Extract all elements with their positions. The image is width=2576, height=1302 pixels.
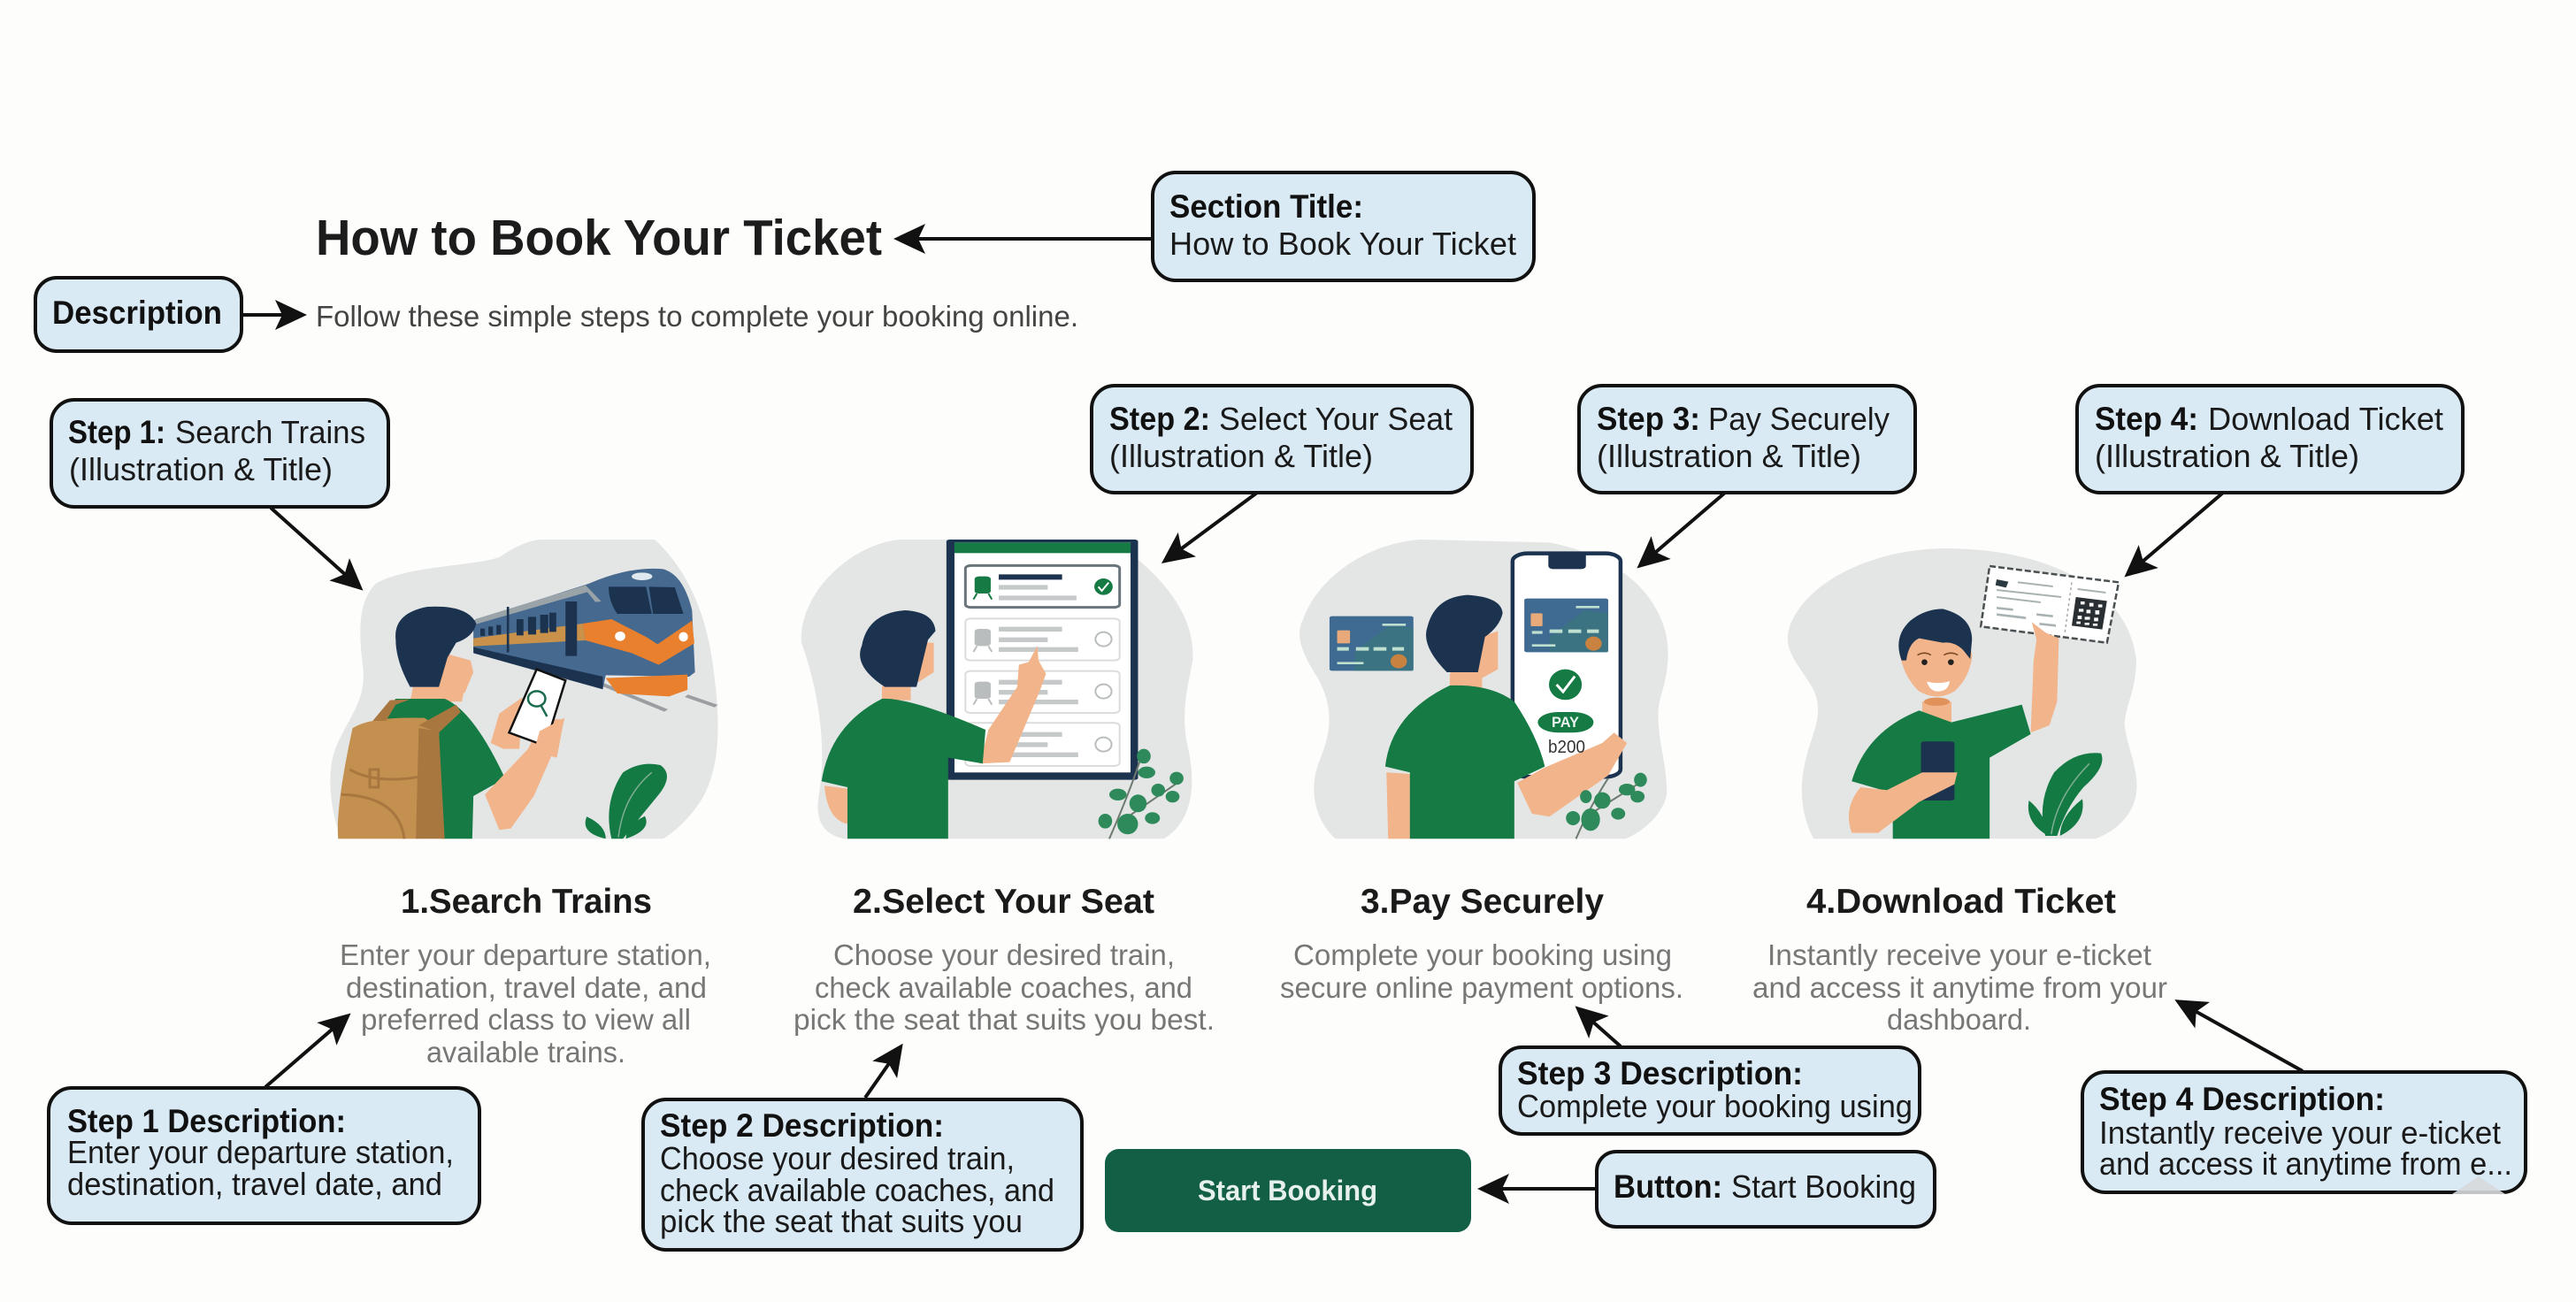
- step 1 description: available trains.: [426, 1036, 625, 1068]
- callout: step 3: Step 3:: [1597, 401, 1700, 437]
- callout: step 2 description: pick the seat that suits you: [660, 1203, 1023, 1239]
- callout: section title: [1153, 172, 1534, 280]
- step 4 description: Instantly receive your e-ticket: [1767, 938, 2151, 971]
- arrow: description: [242, 313, 298, 317]
- callout: step 4: [2077, 386, 2463, 493]
- callout: button: [1597, 1152, 1935, 1227]
- callout: section title: How to Book Your Ticket: [1169, 226, 1516, 262]
- callout: step 2: (Illustration & Title): [1109, 438, 1373, 474]
- callout: step 4 description: Step 4 Description:: [2099, 1081, 2385, 1117]
- illustration: pay securely: [1300, 540, 1668, 839]
- callout: button: Start Booking: [1731, 1168, 1916, 1205]
- callout: step 4 description: Instantly receive your e-ticket: [2099, 1114, 2501, 1151]
- callout: step 4 description: [2082, 1072, 2526, 1194]
- callout: step 1 description: Step 1 Description:: [67, 1103, 346, 1139]
- step 1 description: preferred class to view all: [361, 1003, 691, 1036]
- step 3 description: [1280, 938, 1683, 1004]
- callout: step 2 description: Choose your desired train,: [660, 1140, 1015, 1176]
- step 4 description: dashboard.: [1887, 1003, 2031, 1036]
- amount label: b200: [1548, 738, 1585, 757]
- callout: description: [35, 278, 242, 351]
- arrow: button: [1486, 1187, 1597, 1191]
- callout: step 4: (Illustration & Title): [2095, 438, 2359, 474]
- callout: description: Description: [52, 295, 222, 331]
- arrow: step 3: [1644, 493, 1725, 563]
- callout: step 3 description: Step 3 Description:: [1517, 1055, 1803, 1091]
- step 4 heading: 4.Download Ticket: [1806, 883, 2116, 921]
- step 3 heading: 3.Pay Securely: [1361, 883, 1604, 921]
- callout: step 1 description: Enter your departure station,: [67, 1134, 454, 1170]
- callout: button: Button:: [1614, 1168, 1722, 1205]
- arrow: step 2: [1169, 493, 1257, 558]
- callout: step 1: [51, 400, 388, 507]
- callout: step 2: [1092, 386, 1472, 493]
- arrow: step 4: [2131, 493, 2223, 571]
- callout: step 3 description: Complete your booking using: [1517, 1088, 1913, 1124]
- callout: step 1 description: destination, travel date, and: [67, 1166, 442, 1202]
- callout: step 1: Search Trains: [175, 414, 365, 450]
- illustration: search trains: [330, 540, 718, 839]
- step 1 heading: 1.Search Trains: [401, 883, 652, 921]
- step 1 description: destination, travel date, and: [346, 971, 707, 1004]
- arrow: step 1: [271, 508, 356, 585]
- arrow: section title to title: [902, 237, 1153, 241]
- arrow: step 3 description: [1582, 1012, 1621, 1046]
- callout: section title: Section Title:: [1169, 188, 1363, 225]
- callout: step 3 description: [1500, 1047, 1920, 1134]
- step 2 description: check available coaches, and: [815, 971, 1192, 1004]
- step 2 description: [794, 938, 1215, 1036]
- step 3 description: Complete your booking using: [1293, 938, 1672, 971]
- callout: step 2: Select Your Seat: [1219, 401, 1453, 437]
- callout: step 2 description: [643, 1099, 1082, 1250]
- callout: step 2: Step 2:: [1109, 401, 1210, 437]
- step 2 heading: 2.Select Your Seat: [853, 883, 1154, 921]
- callout: step 3: [1579, 386, 1915, 493]
- callout: step 1: Step 1:: [68, 414, 165, 450]
- callout: step 2 description: check available coaches, and: [660, 1172, 1054, 1208]
- step 3 description: secure online payment options.: [1280, 971, 1683, 1004]
- title: How to Book Your Ticket: [316, 210, 882, 266]
- step 4 description: and access it anytime from your: [1752, 971, 2167, 1004]
- arrow: step 1 description: [265, 1019, 344, 1087]
- callout: step 3: (Illustration & Title): [1597, 438, 1861, 474]
- illustration: download ticket: [1788, 548, 2136, 839]
- pay label: PAY: [1552, 714, 1580, 731]
- callout: step 4: Download Ticket: [2208, 401, 2443, 437]
- callout: step 4: Step 4:: [2095, 401, 2198, 437]
- step 2 description: pick the seat that suits you best.: [794, 1003, 1215, 1036]
- callout: step 1: (Illustration & Title): [69, 451, 333, 487]
- step 4 description: [1752, 938, 2167, 1036]
- button: start booking: [1105, 1149, 1471, 1232]
- step 1 description: [340, 938, 711, 1068]
- arrow: step 4 description: [2182, 1004, 2303, 1071]
- callout: step 4 description: and access it anytime from e...: [2099, 1145, 2512, 1182]
- illustration: select your seat: [801, 540, 1192, 839]
- callout: step 2 description: Step 2 Description:: [660, 1107, 944, 1144]
- description text: Follow these simple steps to complete your booking online.: [316, 300, 1078, 333]
- step 2 description: Choose your desired train,: [833, 938, 1175, 971]
- arrow: step 2 description: [865, 1051, 898, 1098]
- callout: step 1 description: [49, 1088, 479, 1223]
- step 1 description: Enter your departure station,: [340, 938, 711, 971]
- button: start booking: Start Booking: [1198, 1175, 1377, 1206]
- callout: step 3: Pay Securely: [1708, 401, 1890, 437]
